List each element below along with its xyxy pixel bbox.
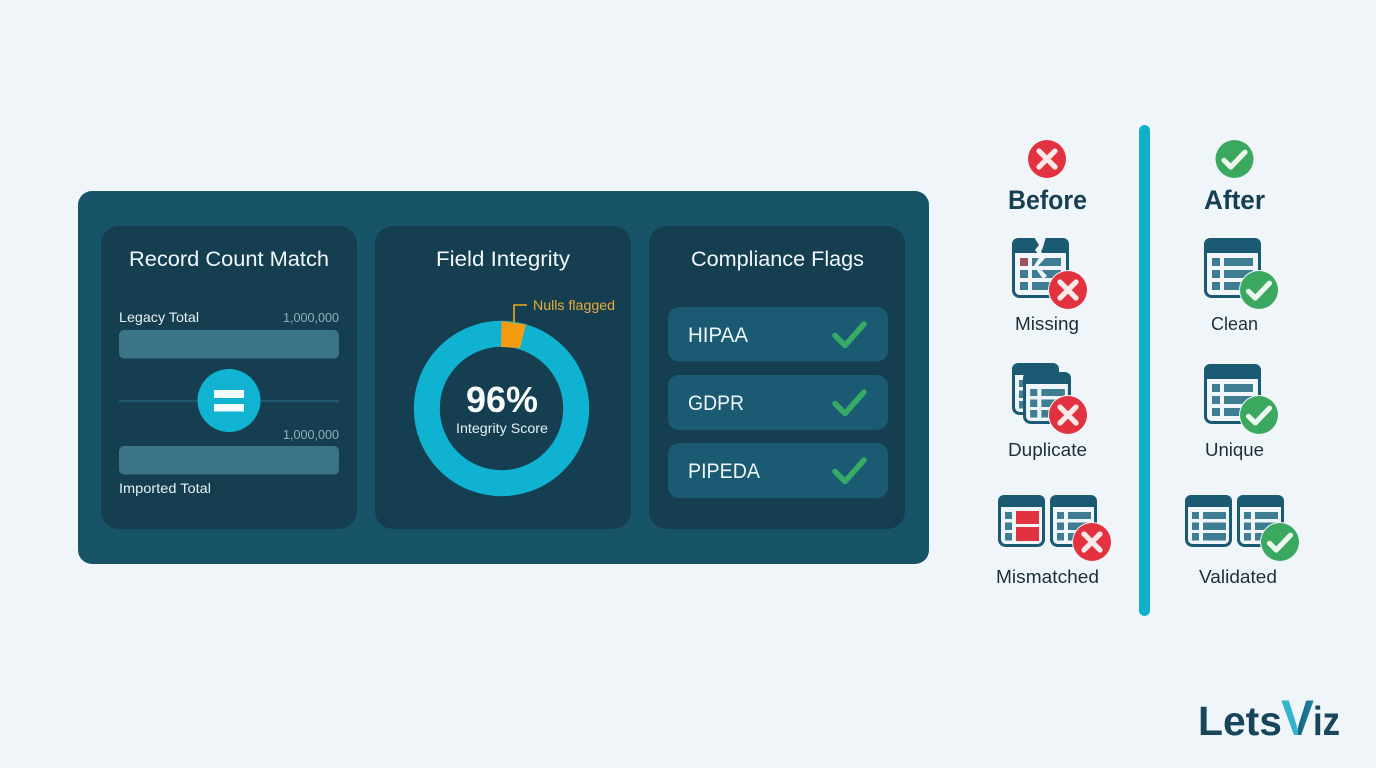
donut chart (427, 305, 576, 483)
label: unique: Unique (1205, 440, 1264, 460)
icon: duplicate tables (1012, 363, 1088, 435)
logo: LetsViz (1198, 690, 1340, 746)
row: PIPEDA (668, 443, 888, 498)
panel: compliance flags (649, 226, 905, 529)
icon: equals (198, 369, 260, 432)
label: mismatched: Mismatched (996, 567, 1099, 587)
label: clean: Clean (1211, 314, 1258, 334)
column: after (1185, 139, 1300, 587)
heading: record count match: Record Count Match (129, 248, 329, 271)
annotation: nulls flagged: Nulls flagged (533, 297, 615, 313)
heading: field integrity: Field Integrity (436, 248, 571, 271)
panel: record count match (101, 226, 357, 529)
row: GDPR (668, 375, 888, 430)
icon: after check (1214, 139, 1254, 179)
icon: validated tables (1185, 495, 1300, 562)
icon: clean table (1204, 238, 1279, 310)
label: duplicate: Duplicate (1008, 440, 1087, 460)
row: HIPAA: HIPAA (688, 324, 748, 347)
logo: LetsViz: V (1281, 690, 1315, 746)
connector line (119, 400, 339, 402)
panel: validation dashboard (78, 191, 929, 564)
row: HIPAA (668, 307, 888, 362)
label: integrity score: Integrity Score (456, 420, 548, 436)
row: GDPR: GDPR (688, 392, 744, 415)
bar: legacy total (119, 330, 339, 358)
label: legacy total: Legacy Total (119, 309, 199, 325)
value: imported total: 1,000,000 (283, 428, 339, 442)
column: before (996, 139, 1112, 587)
value: 96%: 96% (466, 379, 538, 420)
panel: field integrity (375, 226, 631, 529)
heading: compliance flags: Compliance Flags (691, 248, 864, 271)
row: PIPEDA: PIPEDA (688, 460, 760, 483)
icon: missing table (1012, 237, 1088, 310)
label: imported total: Imported Total (119, 480, 211, 496)
heading: before: Before (1008, 185, 1087, 215)
logo: LetsViz: Lets (1198, 698, 1282, 744)
icon: mismatched tables (998, 495, 1112, 562)
label: validated: Validated (1199, 567, 1277, 587)
logo: LetsViz: iz (1313, 698, 1340, 744)
bar: imported total (119, 446, 339, 474)
icon: unique table (1204, 364, 1279, 435)
label: missing: Missing (1015, 314, 1079, 334)
divider (1139, 125, 1150, 616)
heading: after: After (1204, 185, 1265, 215)
icon: before cross (1027, 139, 1067, 179)
value: legacy total: 1,000,000 (283, 311, 339, 325)
leader line (514, 305, 527, 322)
